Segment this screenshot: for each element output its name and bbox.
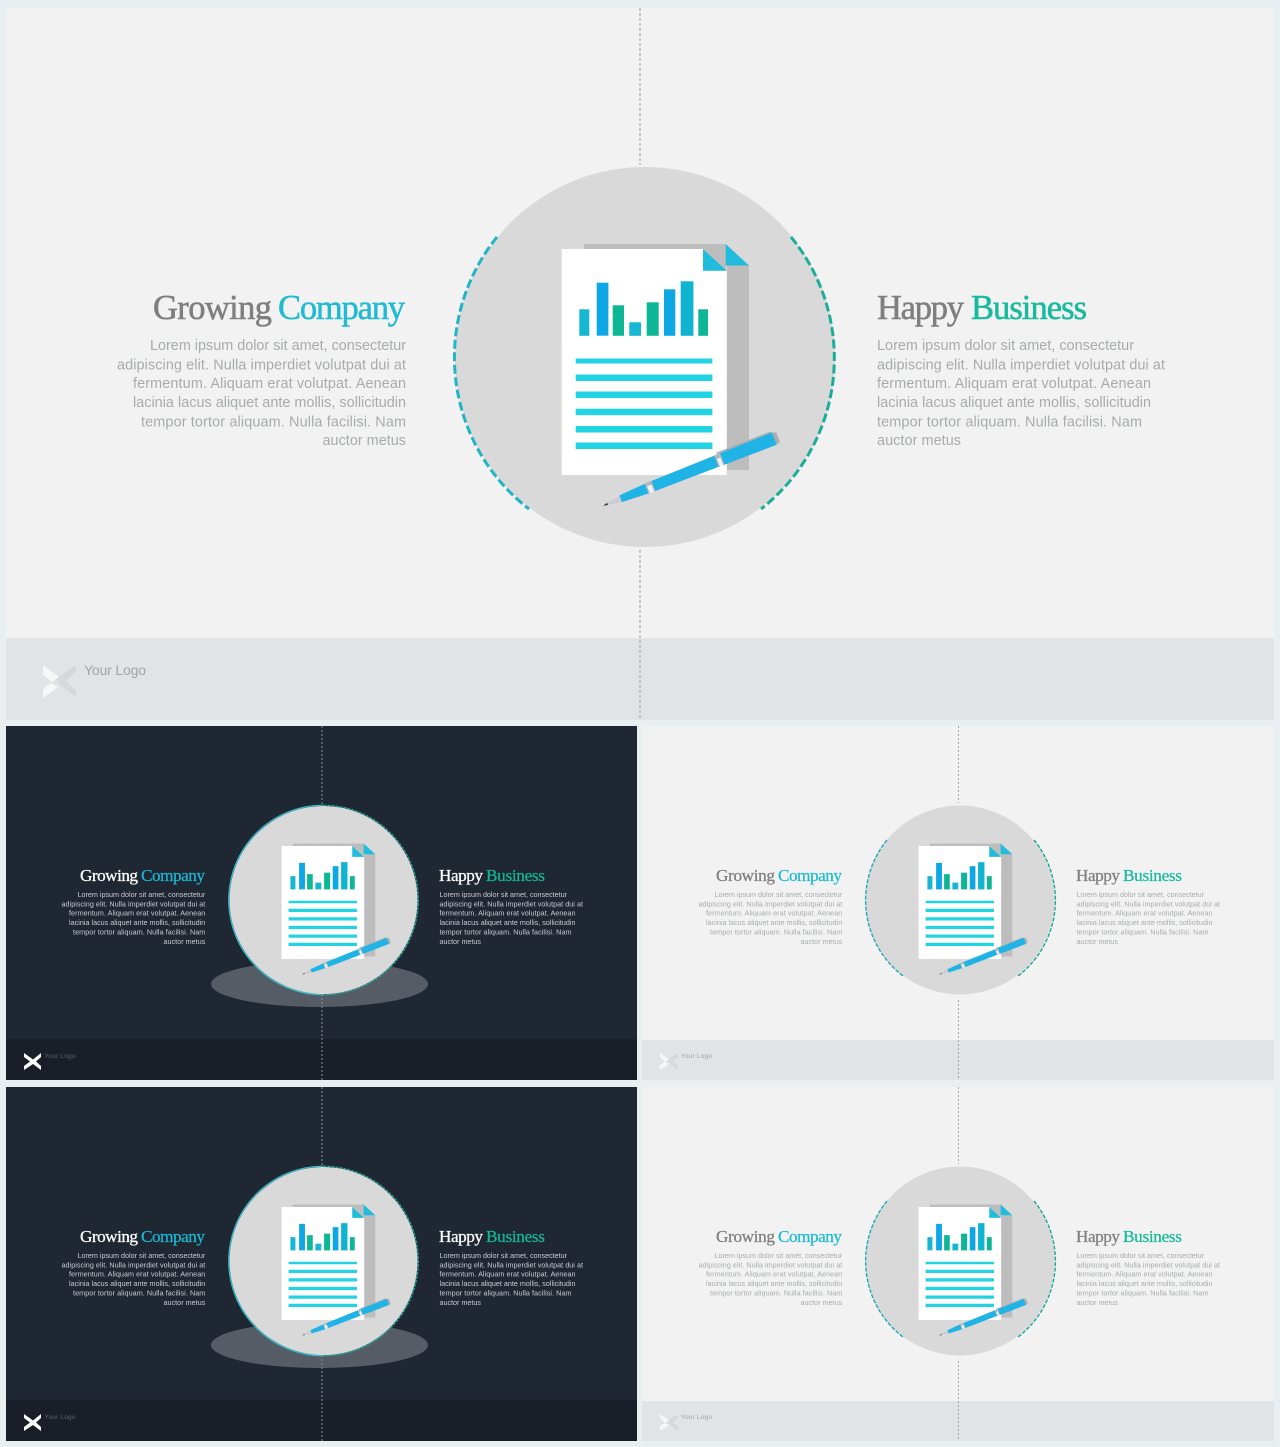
central circle (866, 806, 1054, 994)
panel: dark slide top (6, 726, 637, 1080)
text block: left (698, 1251, 843, 1307)
text block: right: lacinia lacus aliquet ante mollis, sollicitudin (877, 395, 1151, 411)
heading: Growing Company: Company (778, 866, 842, 885)
text block: left: auctor metus (322, 433, 406, 449)
central circle (455, 167, 835, 547)
panel: light slide bottom (642, 1087, 1274, 1441)
text block: right: fermentum. Aliquam erat volutpat. Aenean (877, 376, 1151, 392)
heading: Happy Business: Happy (439, 866, 483, 885)
slide background (6, 726, 637, 1080)
text block: right: fermentum. Aliquam erat volutpat. Aenean (1076, 1270, 1212, 1279)
icon: document with bar chart and pen (562, 244, 780, 512)
text block: right: Lorem ipsum dolor sit amet, consectetur (440, 890, 568, 899)
text block: right: tempor tortor aliquam. Nulla facilisi. Nam (1076, 928, 1208, 937)
text block: left: adipiscing elit. Nulla imperdiet volutpat dui at (62, 1260, 205, 1269)
heading: Happy Business: Business (1123, 1227, 1182, 1246)
dashed arc left (454, 237, 529, 509)
text block: left: lacinia lacus aliquet ante mollis, sollicitudin (69, 918, 205, 927)
central circle (230, 806, 418, 994)
text block: left: auctor metus (164, 937, 206, 946)
heading: Growing Company: Growing (716, 866, 775, 885)
text block: left (117, 338, 406, 449)
text block: right: Lorem ipsum dolor sit amet, consectetur (440, 1251, 568, 1260)
text block: left: Lorem ipsum dolor sit amet, consectetur (78, 1251, 206, 1260)
logo text: Your Logo (681, 1053, 712, 1060)
icon: logo (24, 1414, 41, 1431)
text block: left: tempor tortor aliquam. Nulla facilisi. Nam (73, 928, 205, 937)
text block: right: auctor metus (877, 433, 961, 449)
dashed arc left (866, 840, 903, 976)
text block: right: Lorem ipsum dolor sit amet, consectetur (1076, 1251, 1205, 1260)
footer band (6, 638, 1274, 720)
text block: left: lacinia lacus aliquet ante mollis, sollicitudin (706, 1279, 842, 1288)
text block: left: fermentum. Aliquam erat volutpat. Aenean (133, 376, 406, 392)
heading: Growing Company: Growing (80, 866, 138, 885)
text block: left: Lorem ipsum dolor sit amet, consectetur (714, 1251, 843, 1260)
heading: Happy Business: Business (1123, 866, 1182, 885)
text block: left: tempor tortor aliquam. Nulla facilisi. Nam (710, 1289, 842, 1298)
icon: logo (43, 665, 76, 698)
text block: right: auctor metus (1076, 937, 1118, 946)
logo text: Your Logo (44, 1053, 76, 1060)
text block: left (698, 890, 843, 946)
text block: left (62, 1251, 206, 1307)
text block: right: Lorem ipsum dolor sit amet, consectetur (877, 338, 1134, 354)
text block: left: lacinia lacus aliquet ante mollis, sollicitudin (69, 1279, 205, 1288)
text block: right (1076, 1251, 1220, 1307)
slide background (642, 1087, 1274, 1401)
icon: logo (660, 1053, 678, 1070)
shadow ellipse (211, 961, 428, 1007)
heading: Happy Business: Happy (1076, 1227, 1120, 1246)
text block: left: tempor tortor aliquam. Nulla facilisi. Nam (710, 928, 842, 937)
text block: right: adipiscing elit. Nulla imperdiet volutpat dui at (1076, 899, 1220, 908)
heading: Growing Company: Company (141, 1227, 205, 1246)
text block: right: fermentum. Aliquam erat volutpat. Aenean (1076, 909, 1212, 918)
text block: left: adipiscing elit. Nulla imperdiet volutpat dui at (698, 1260, 842, 1269)
text block: right: fermentum. Aliquam erat volutpat. Aenean (440, 1270, 576, 1279)
text block: right (877, 338, 1165, 449)
text block: right: adipiscing elit. Nulla imperdiet volutpat dui at (440, 1260, 583, 1269)
heading: Growing Company: Growing (153, 289, 272, 327)
text block: right: auctor metus (440, 1298, 481, 1307)
text block: right: Lorem ipsum dolor sit amet, consectetur (1076, 890, 1205, 899)
text block: left: fermentum. Aliquam erat volutpat. Aenean (706, 1270, 842, 1279)
text block: right: tempor tortor aliquam. Nulla facilisi. Nam (440, 928, 572, 937)
text block: left: adipiscing elit. Nulla imperdiet volutpat dui at (698, 899, 842, 908)
text block: right (440, 890, 583, 946)
dashed arc right (761, 237, 834, 509)
text block: left: Lorem ipsum dolor sit amet, consectetur (150, 338, 406, 354)
text block: right: lacinia lacus aliquet ante mollis, sollicitudin (1076, 918, 1212, 927)
text block: left: auctor metus (800, 937, 843, 946)
panel: large light slide (6, 8, 1274, 720)
dashed arc right (1018, 1201, 1055, 1337)
dashed arc left (866, 1201, 903, 1337)
central circle (866, 1166, 1054, 1356)
text block: right: auctor metus (440, 937, 481, 946)
slide background (6, 1087, 637, 1441)
heading: Happy Business: Business (971, 289, 1087, 327)
dashed arc right (1018, 840, 1055, 976)
text block: left: adipiscing elit. Nulla imperdiet volutpat dui at (62, 899, 205, 908)
text block: left: fermentum. Aliquam erat volutpat. Aenean (69, 1270, 205, 1279)
text block: left: auctor metus (800, 1298, 843, 1307)
heading: Growing Company: Company (278, 289, 406, 327)
heading: Happy Business: Business (486, 1227, 545, 1246)
icon: document with bar chart and pen (282, 1204, 391, 1338)
icon: document with bar chart and pen (919, 1204, 1028, 1338)
text block: right: lacinia lacus aliquet ante mollis, sollicitudin (440, 1279, 576, 1288)
text block: right: lacinia lacus aliquet ante mollis, sollicitudin (1076, 1279, 1212, 1288)
text block: left: auctor metus (164, 1298, 206, 1307)
text block: right: tempor tortor aliquam. Nulla facilisi. Nam (440, 1289, 572, 1298)
icon: logo (660, 1414, 678, 1431)
text block: right: fermentum. Aliquam erat volutpat. Aenean (440, 909, 576, 918)
footer band (642, 1040, 1274, 1080)
text block: left (62, 890, 206, 946)
text block: left: fermentum. Aliquam erat volutpat. Aenean (706, 909, 842, 918)
icon: logo (24, 1053, 41, 1070)
text block: left: Lorem ipsum dolor sit amet, consectetur (714, 890, 843, 899)
heading: Happy Business: Happy (1076, 866, 1120, 885)
footer band (6, 1400, 637, 1441)
dashed ring (229, 1166, 418, 1356)
footer band (642, 1401, 1274, 1441)
central circle (230, 1167, 418, 1355)
footer band (6, 1039, 637, 1080)
slide background (6, 8, 1274, 638)
text block: right: adipiscing elit. Nulla imperdiet volutpat dui at (1076, 1260, 1220, 1269)
text block: left: Lorem ipsum dolor sit amet, consectetur (78, 890, 206, 899)
text block: left: fermentum. Aliquam erat volutpat. Aenean (69, 909, 205, 918)
text block: right: adipiscing elit. Nulla imperdiet volutpat dui at (440, 899, 583, 908)
text block: right: adipiscing elit. Nulla imperdiet volutpat dui at (877, 357, 1165, 373)
icon: document with bar chart and pen (919, 844, 1028, 977)
logo text: Your Logo (681, 1414, 712, 1421)
logo text: Your Logo (84, 662, 146, 678)
heading: Growing Company: Growing (716, 1227, 775, 1246)
text block: left: adipiscing elit. Nulla imperdiet volutpat dui at (117, 357, 406, 373)
text block: right: tempor tortor aliquam. Nulla facilisi. Nam (877, 414, 1142, 430)
text block: right (440, 1251, 583, 1307)
text block: left: tempor tortor aliquam. Nulla facilisi. Nam (73, 1289, 205, 1298)
heading: Happy Business: Business (486, 866, 545, 885)
text block: right: lacinia lacus aliquet ante mollis, sollicitudin (440, 918, 576, 927)
text block: left: lacinia lacus aliquet ante mollis, sollicitudin (706, 918, 842, 927)
text block: left: tempor tortor aliquam. Nulla facilisi. Nam (141, 414, 406, 430)
shadow ellipse (211, 1322, 428, 1368)
heading: Growing Company: Growing (80, 1227, 138, 1246)
heading: Growing Company: Company (141, 866, 205, 885)
text block: left: lacinia lacus aliquet ante mollis, sollicitudin (133, 395, 406, 411)
heading: Growing Company: Company (778, 1227, 842, 1246)
text block: right: auctor metus (1076, 1298, 1118, 1307)
heading: Happy Business: Happy (439, 1227, 483, 1246)
icon: document with bar chart and pen (282, 844, 391, 977)
text block: right: tempor tortor aliquam. Nulla facilisi. Nam (1076, 1289, 1208, 1298)
text block: right (1076, 890, 1220, 946)
heading: Happy Business: Happy (877, 289, 965, 327)
panel: light slide top (642, 726, 1274, 1080)
logo text: Your Logo (44, 1414, 76, 1421)
panel: dark slide bottom (6, 1087, 637, 1441)
dashed ring (229, 805, 418, 995)
slide background (642, 726, 1274, 1040)
